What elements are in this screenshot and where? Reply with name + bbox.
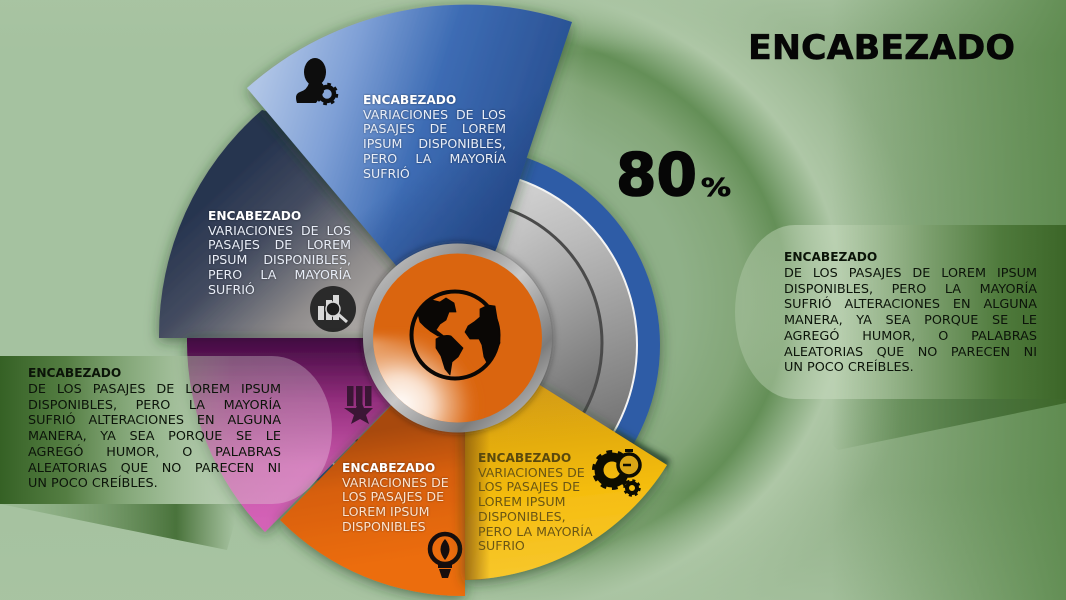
percentage: 80%: 80 — [616, 140, 697, 209]
panel: right text callout — [735, 225, 1066, 399]
text: yellow segment: ENCABEZADO — [478, 451, 571, 465]
text: right callout: DE LOS PASAJES DE LOREM IPSUM — [784, 266, 1037, 281]
text: blue segment: ENCABEZADO — [363, 93, 456, 107]
text: right callout — [784, 250, 1037, 382]
text: right callout: SUFRIÓ ALTERACIONES EN ALGUNA — [784, 297, 1037, 312]
icon: gears and stopwatch — [594, 449, 640, 496]
icon: globe — [412, 292, 500, 378]
text: blue segment: PASAJES DE LOREM — [363, 121, 506, 136]
text: left callout: AGREGÓ HUMOR, O PALABRAS — [28, 445, 281, 460]
text: left callout: ENCABEZADO — [28, 366, 121, 380]
text: slate segment: SUFRIÓ — [208, 282, 255, 297]
icon: medal with star — [344, 386, 373, 424]
icon: light bulb — [430, 534, 460, 578]
icon: person with gear — [296, 58, 336, 104]
text: right callout: ENCABEZADO — [784, 250, 877, 264]
title: ENCABEZADO — [748, 28, 1015, 68]
text: blue segment: IPSUM DISPONIBLES, — [363, 136, 506, 151]
text: orange segment — [342, 461, 462, 541]
percentage: 80%: % — [701, 173, 731, 202]
ring: blue outer band — [264, 147, 660, 543]
text: yellow segment: SUFRIO — [478, 538, 525, 553]
text: orange segment: DISPONIBLES — [342, 519, 426, 534]
icon: chart and magnifier — [310, 286, 356, 332]
text: yellow segment: LOS PASAJES DE — [478, 479, 580, 494]
panel: magenta segment — [187, 338, 457, 532]
text: orange segment: LOREM IPSUM — [342, 504, 429, 519]
text: slate segment: VARIACIONES DE LOS — [208, 223, 351, 238]
shadow under yellow segment corner — [604, 429, 670, 470]
text: yellow segment: DISPONIBLES, — [478, 509, 566, 524]
text: slate segment: PERO LA MAYORÍA — [208, 267, 351, 282]
panel: yellow segment — [465, 338, 667, 580]
ring: outer grey band — [287, 170, 637, 520]
panel: left text callout — [0, 356, 332, 504]
panel: slate segment — [159, 110, 457, 338]
text: yellow segment: LOREM IPSUM — [478, 494, 565, 509]
text: yellow segment: PERO LA MAYORÍA — [478, 524, 593, 539]
text: right callout: UN POCO CREÍBLES. — [784, 360, 914, 375]
text: yellow segment — [478, 451, 608, 561]
wedge shadow under left panel — [0, 504, 240, 550]
text: left callout: DISPONIBLES, PERO LA MAYORÍA — [28, 398, 281, 412]
text: yellow segment: VARIACIONES DE — [478, 465, 585, 480]
text: slate segment: PASAJES DE LOREM — [208, 237, 351, 252]
text: orange segment: ENCABEZADO — [342, 461, 435, 475]
text: blue segment: VARIACIONES DE LOS — [363, 107, 506, 122]
text: right callout: AGREGÓ HUMOR, O PALABRAS — [784, 329, 1037, 344]
wedge shadow under right panel — [780, 399, 1066, 450]
text: orange segment: VARIACIONES DE — [342, 475, 449, 490]
panel: blue segment — [247, 5, 572, 338]
text: blue segment — [363, 93, 506, 185]
text: right callout: DISPONIBLES, PERO LA MAYORÍA — [784, 282, 1037, 296]
text: orange segment: LOS PASAJES DE — [342, 489, 444, 504]
ring: inner grey band — [318, 201, 602, 485]
text: left callout: DE LOS PASAJES DE LOREM IPSUM — [28, 382, 281, 397]
text: slate segment: IPSUM DISPONIBLES, — [208, 252, 351, 267]
text: blue segment: SUFRIÓ — [363, 166, 410, 181]
text: left callout: ALEATORIAS QUE NO PARECEN NI — [28, 460, 281, 476]
center disc — [363, 244, 552, 440]
panel: orange segment — [280, 338, 465, 596]
text: blue segment: PERO LA MAYORÍA — [363, 151, 506, 166]
text: right callout: MANERA, YA SEA PORQUE SE LE — [784, 313, 1037, 328]
text: left callout: UN POCO CREÍBLES. — [28, 476, 158, 491]
text: left callout: SUFRIÓ ALTERACIONES EN ALGUNA — [28, 413, 281, 428]
text: slate segment — [208, 209, 351, 301]
text: slate segment: ENCABEZADO — [208, 209, 301, 223]
text: left callout — [28, 366, 281, 498]
text: left callout: MANERA, YA SEA PORQUE SE LE — [28, 429, 281, 444]
text: right callout: ALEATORIAS QUE NO PARECEN NI — [784, 344, 1037, 360]
